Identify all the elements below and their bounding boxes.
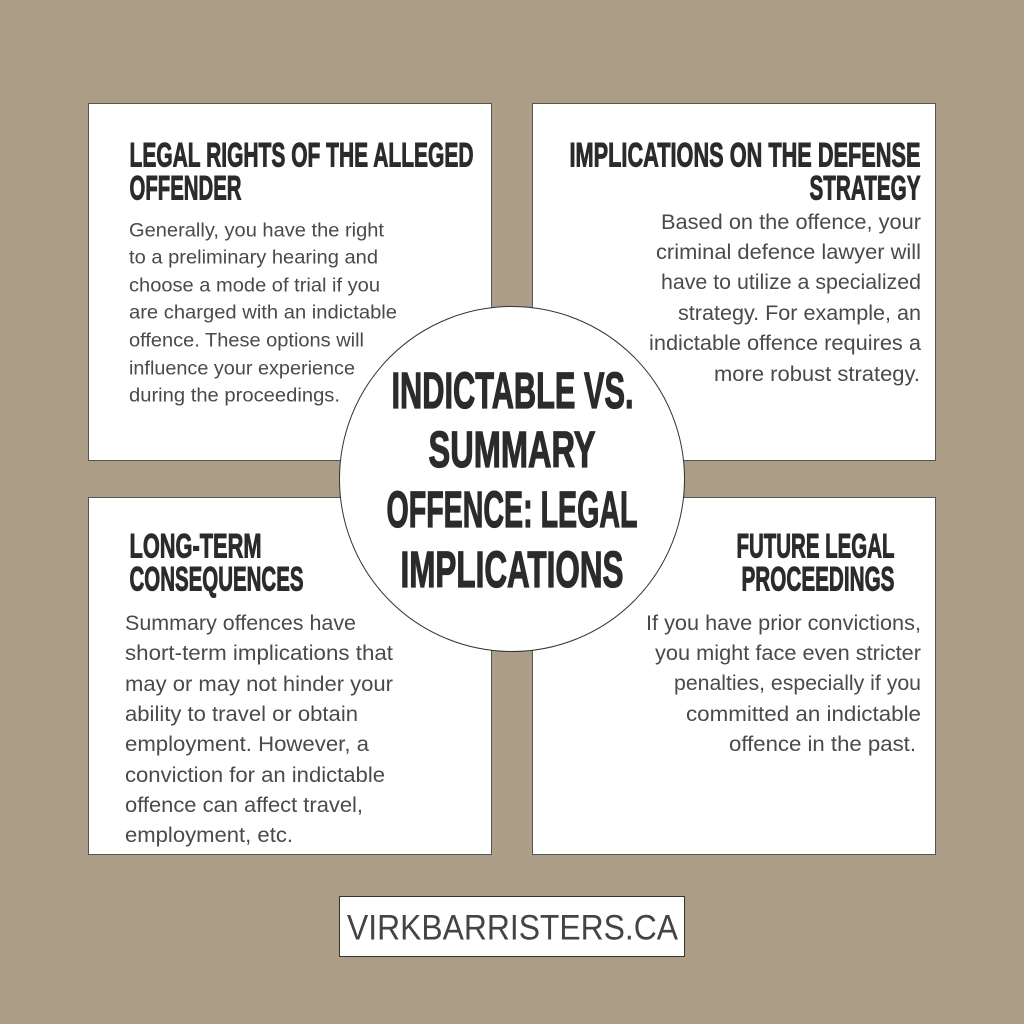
panel: future legal proceedings [532, 498, 936, 854]
text block: long-term body: employment, etc. [125, 824, 293, 847]
text block: long-term body: ability to travel or obtain [125, 703, 358, 726]
text block: legal rights body: during the proceedings. [129, 384, 340, 406]
text block: implications body: more robust strategy. [714, 363, 920, 386]
text block: implications body [649, 211, 921, 386]
text block: implications body: strategy. For example, an [678, 302, 921, 325]
text block: long-term body: conviction for an indictable [125, 764, 385, 787]
text block: long-term body [125, 612, 393, 847]
heading: legal rights [130, 136, 474, 208]
text block: implications body: Based on the offence, your [661, 211, 921, 234]
footer website label: VIRKBARRISTERS.CA [347, 908, 679, 948]
text block: long-term body: may or may not hinder your [125, 673, 393, 696]
text block: legal rights body: influence your experience [129, 358, 355, 380]
text block: future legal body: offence in the past. [729, 733, 916, 756]
heading: long-term consequences [130, 528, 304, 598]
panel: long-term consequences [88, 498, 492, 854]
text block: long-term body: Summary offences have [125, 612, 356, 635]
text block: future legal body: penalties, especially if you [674, 672, 921, 695]
text block: implications body: indictable offence requires a [649, 332, 921, 355]
panel: legal rights of the alleged offender [88, 104, 492, 460]
text block: legal rights body: choose a mode of trial if you [129, 274, 380, 296]
heading: implications [570, 136, 920, 208]
text block: future legal body: committed an indictable [686, 703, 921, 726]
text block: legal rights body: to a preliminary hearing and [129, 246, 378, 268]
title: SUMMARY [428, 421, 596, 478]
text block: future legal body: you might face even stricter [655, 642, 921, 665]
text block: implications body: criminal defence lawyer will [656, 241, 921, 264]
heading: future legal proceedings: PROCEEDINGS [742, 560, 894, 598]
heading: future legal proceedings [736, 528, 894, 598]
heading: long-term consequences: LONG-TERM [130, 528, 262, 566]
heading: legal rights: LEGAL RIGHTS OF THE ALLEGED [130, 136, 474, 174]
text block: legal rights body [129, 220, 397, 406]
title [386, 362, 638, 598]
text block: long-term body: short-term implications that [125, 642, 393, 665]
heading: legal rights: OFFENDER [130, 170, 242, 208]
title: IMPLICATIONS [400, 541, 624, 598]
panel: implications on the defense strategy [532, 104, 936, 460]
text block: future legal body: If you have prior convictions, [646, 612, 921, 635]
text block: legal rights body: are charged with an indictable [129, 302, 397, 324]
text block: long-term body: offence can affect travel, [125, 794, 363, 817]
title: OFFENCE: LEGAL [386, 481, 638, 538]
heading: future legal proceedings: FUTURE LEGAL [736, 528, 894, 566]
footer website label [340, 896, 684, 956]
text block: legal rights body: offence. These options will [129, 330, 364, 352]
heading: long-term consequences: CONSEQUENCES [130, 560, 304, 598]
text block: long-term body: employment. However, a [125, 733, 369, 756]
title: INDICTABLE VS. [392, 362, 634, 419]
heading: implications: STRATEGY [810, 170, 920, 208]
center circle with title [340, 306, 684, 652]
text block: implications body: have to utilize a specialized [661, 271, 921, 294]
text block: future legal body [646, 612, 921, 756]
text block: legal rights body: Generally, you have the right [129, 220, 385, 242]
